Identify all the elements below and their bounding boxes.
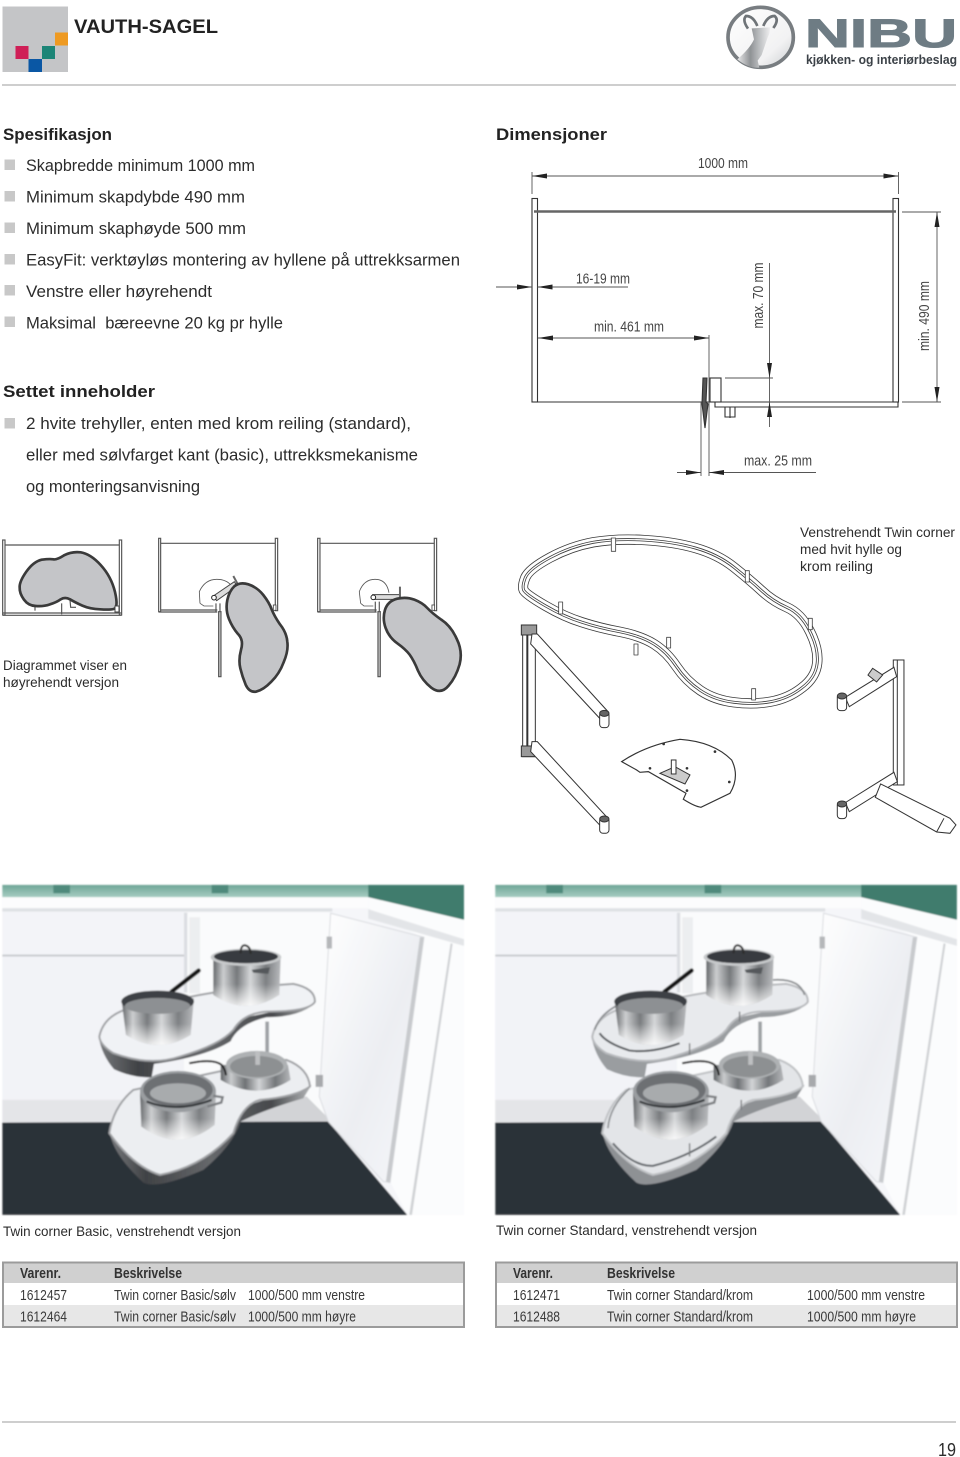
tagline: kjøkken- og interiørbeslag xyxy=(806,53,957,67)
logo: Vauth-Sagel mark xyxy=(2,6,68,72)
left support arms xyxy=(521,625,609,833)
row 1612457: 1612457 xyxy=(20,1288,67,1304)
caption: right-hand note: høyrehendt versjon xyxy=(3,674,119,690)
row 1612488: 1000/500 mm høyre xyxy=(807,1310,916,1326)
header row: Beskrivelse xyxy=(114,1266,182,1282)
arrowheads xyxy=(517,174,940,475)
contents list: og monteringsanvisning xyxy=(26,477,200,496)
row 1612457: 1000/500 mm venstre xyxy=(248,1288,365,1304)
label: max. 25 mm: max. 25 mm xyxy=(744,454,812,470)
label: min. 461 mm: min. 461 mm xyxy=(594,320,664,336)
wordmark: NIBU xyxy=(805,12,957,56)
diagram: closed xyxy=(3,540,122,615)
row 1612471: 1612471 xyxy=(513,1288,560,1304)
icon: goat medallion xyxy=(728,7,793,68)
caption: Standard: Twin corner Standard, venstrehendt versjon xyxy=(496,1222,757,1238)
spec list: Maksimal bæreevne 20 kg pr hylle xyxy=(26,314,283,332)
row 1612471 xyxy=(513,1288,925,1304)
cookware xyxy=(614,945,784,1139)
caption: left-hand model: med hvit hylle og xyxy=(800,541,902,557)
table: Standard xyxy=(496,1262,957,1327)
logo: NIBU xyxy=(728,7,957,68)
header row: Varenr. xyxy=(513,1266,553,1282)
row 1612464: 1000/500 mm høyre xyxy=(248,1310,356,1326)
spec list: Minimum skapdybde 490 mm xyxy=(26,188,245,206)
caption: left-hand model: Venstrehendt Twin corner xyxy=(800,524,955,540)
heading: Spesifikasjon xyxy=(3,125,112,144)
kitchen background xyxy=(495,885,957,1215)
row 1612464 xyxy=(20,1310,356,1326)
panel: Dimensjoner xyxy=(496,125,941,476)
brand name: VAUTH-SAGEL xyxy=(74,17,218,38)
row 1612488 xyxy=(513,1310,916,1326)
heading: Dimensjoner xyxy=(496,125,607,144)
row 1612457: Twin corner Basic/sølv xyxy=(114,1288,237,1304)
caption: Basic: Twin corner Basic, venstrehendt versjon xyxy=(3,1223,241,1239)
cookware xyxy=(121,945,291,1139)
row 1612471: 1000/500 mm venstre xyxy=(807,1288,925,1304)
panel: Spesifikasjon xyxy=(3,125,460,332)
right support arms xyxy=(837,660,956,833)
caption: left-hand model xyxy=(800,524,955,574)
contents list: 2 hvite trehyller, enten med krom reiling (standard), xyxy=(26,414,411,433)
row 1612471: Twin corner Standard/krom xyxy=(607,1288,753,1304)
panel: swing sequence diagrams xyxy=(3,538,461,692)
header row: Beskrivelse xyxy=(607,1266,675,1282)
upper shelf with rail xyxy=(592,980,809,1077)
label: min. 490 mm: min. 490 mm xyxy=(917,281,933,351)
label: 16-19 mm: 16-19 mm xyxy=(576,272,630,288)
kitchen background xyxy=(2,885,464,1215)
photo: Twin corner Standard xyxy=(495,885,957,1215)
heading: Settet inneholder xyxy=(3,382,155,401)
spec list: Venstre eller høyrehendt xyxy=(26,282,212,301)
panel: Settet inneholder xyxy=(3,382,418,496)
table: Basic xyxy=(3,1262,464,1327)
label: max. 70 mm: max. 70 mm xyxy=(751,262,767,328)
caption: right-hand note xyxy=(3,657,127,690)
base plate xyxy=(622,739,735,807)
row 1612457 xyxy=(20,1288,365,1304)
row 1612488: 1612488 xyxy=(513,1310,560,1326)
contents list xyxy=(4,414,418,496)
row 1612464: Twin corner Basic/sølv xyxy=(114,1310,237,1326)
header row xyxy=(20,1266,182,1282)
upper shelf xyxy=(99,984,316,1077)
contents list: eller med sølvfarget kant (basic), uttrekksmekanisme xyxy=(26,446,418,464)
shelf rail xyxy=(523,538,817,703)
header row xyxy=(513,1266,675,1282)
cabinet section xyxy=(532,198,898,428)
label: 1000 mm: 1000 mm xyxy=(698,156,748,172)
diagram: fully out xyxy=(318,538,461,691)
row 1612464: 1612464 xyxy=(20,1310,67,1326)
dimension lines xyxy=(496,172,941,476)
spec list: EasyFit: verktøyløs montering av hyllene på uttrekksarmen xyxy=(26,250,460,270)
header row: Varenr. xyxy=(20,1266,61,1282)
lower shelf with rail xyxy=(602,1060,805,1185)
dimension drawing xyxy=(496,156,941,476)
caption: right-hand note: Diagrammet viser en xyxy=(3,657,127,673)
photo: Twin corner Basic xyxy=(2,885,464,1215)
spec list: Minimum skaphøyde 500 mm xyxy=(26,219,246,238)
caption: left-hand model: krom reiling xyxy=(800,558,873,574)
row 1612488: Twin corner Standard/krom xyxy=(607,1310,753,1326)
exploded parts drawing xyxy=(521,538,956,833)
spec list xyxy=(4,156,460,332)
lower shelf xyxy=(109,1060,312,1185)
spec list: Skapbredde minimum 1000 mm xyxy=(26,156,255,175)
diagram: swinging out xyxy=(159,538,288,692)
